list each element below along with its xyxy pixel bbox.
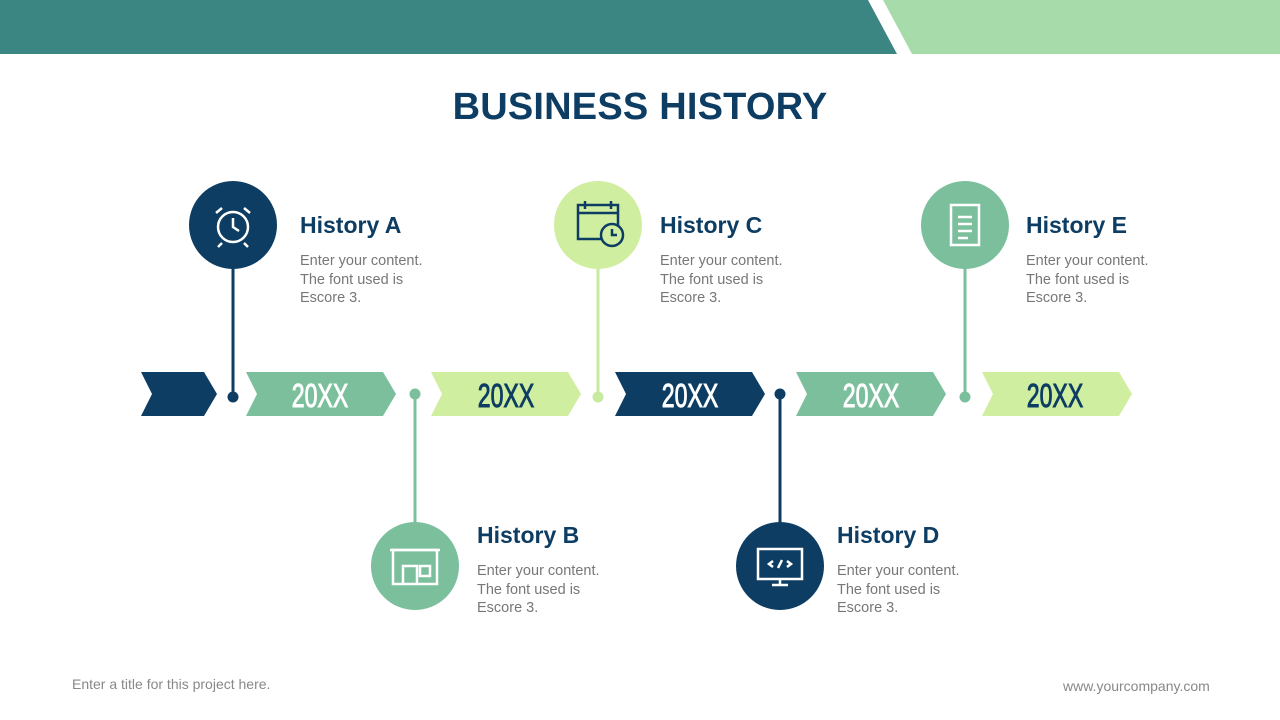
- History E: History E: [1026, 212, 1127, 238]
- History E: Enter your content.: [1026, 253, 1149, 269]
- History C: The font used is: [660, 272, 763, 288]
- History B: The font used is: [477, 582, 580, 598]
- title: BUSINESS HISTORY: [453, 86, 827, 128]
- History A: [300, 212, 423, 306]
- History D: History D: [837, 522, 939, 548]
- History B: History B: [477, 522, 579, 548]
- History A: The font used is: [300, 272, 403, 288]
- History D: Enter your content.: [837, 563, 960, 579]
- header band: [0, 0, 1280, 54]
- History E: The font used is: [1026, 272, 1129, 288]
- timeline: 20XX: [292, 378, 348, 415]
- History C: History C: [660, 212, 762, 238]
- History A: History A: [300, 212, 401, 238]
- History B: [477, 522, 600, 616]
- timeline: 20XX: [1027, 378, 1083, 415]
- History D: [837, 522, 960, 616]
- footer right: www.yourcompany.com: [1063, 678, 1210, 694]
- timeline: 20XX: [478, 378, 534, 415]
- History E: Escore 3.: [1026, 290, 1087, 306]
- History B: Enter your content.: [477, 563, 600, 579]
- History C: [660, 212, 783, 306]
- timeline: 20XX: [662, 378, 718, 415]
- History A: Enter your content.: [300, 253, 423, 269]
- History A: Escore 3.: [300, 290, 361, 306]
- History C: Escore 3.: [660, 290, 721, 306]
- History B: Escore 3.: [477, 600, 538, 616]
- History D: Escore 3.: [837, 600, 898, 616]
- History C: Enter your content.: [660, 253, 783, 269]
- History D: The font used is: [837, 582, 940, 598]
- timeline: 20XX: [843, 378, 899, 415]
- footer left: Enter a title for this project here.: [72, 676, 270, 692]
- History E: [1026, 212, 1149, 306]
